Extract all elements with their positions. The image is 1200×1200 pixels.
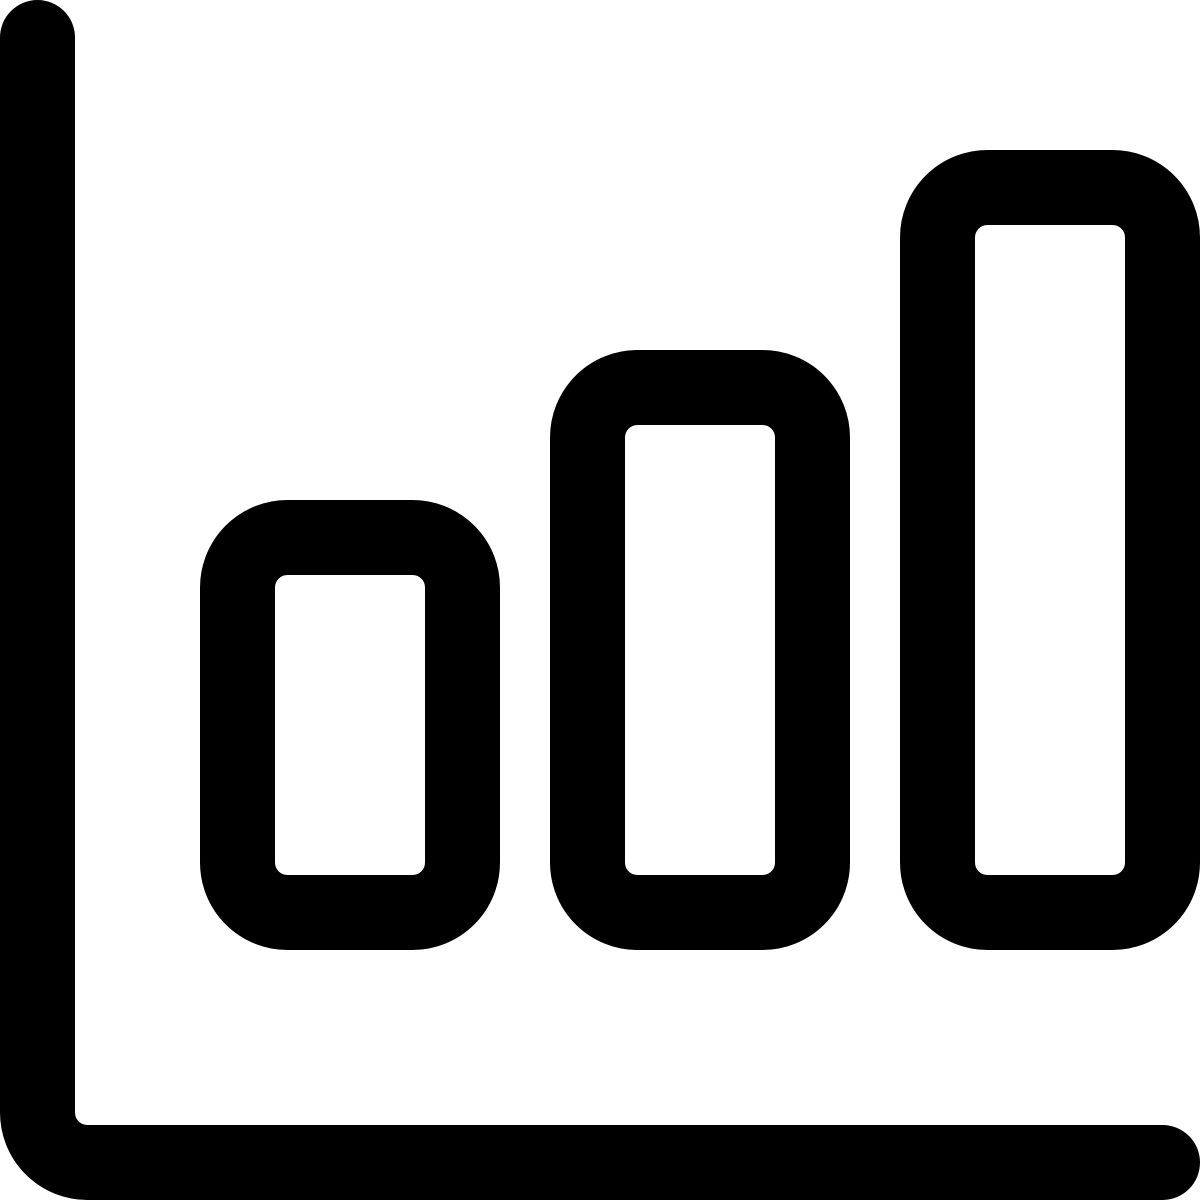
bar: tall (938, 188, 1162, 912)
bar: medium (588, 388, 812, 912)
bar: short (238, 538, 462, 912)
